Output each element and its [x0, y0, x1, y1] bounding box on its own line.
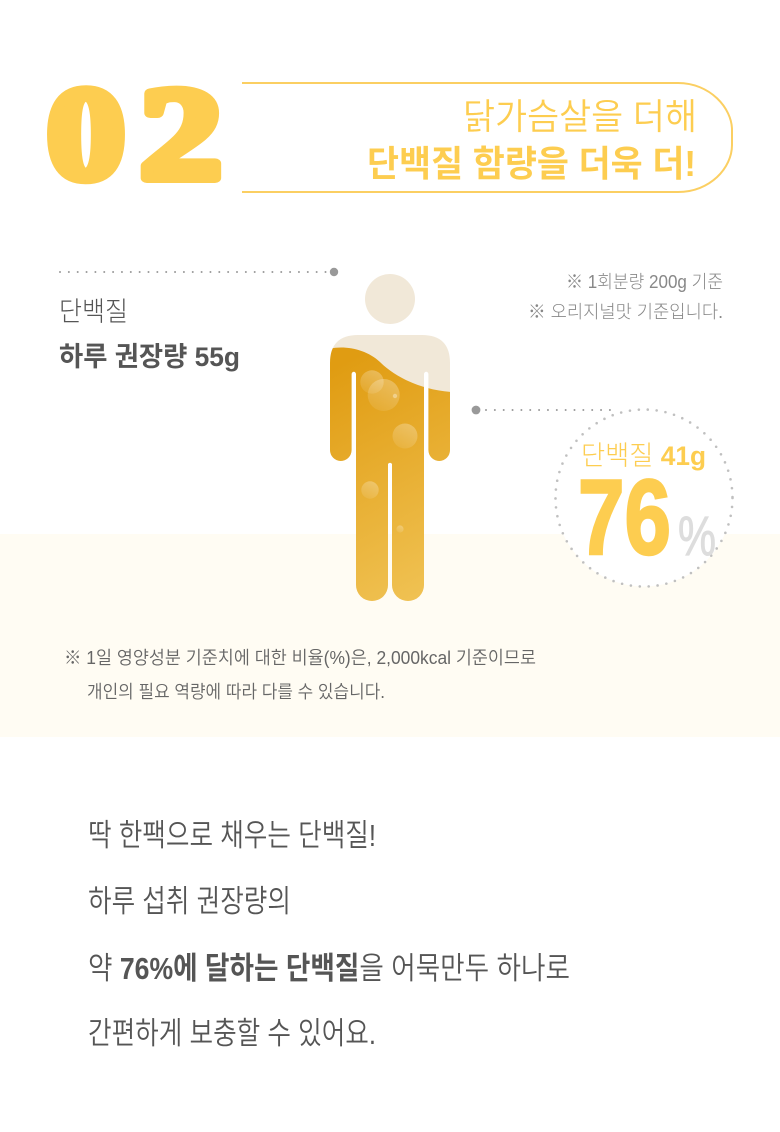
human figure [328, 274, 452, 610]
dotted leader right [472, 406, 610, 414]
dotted circle [556, 410, 732, 586]
bubbles [360, 370, 418, 533]
copy line 3: 약 76%에 달하는 단백질을 어묵만두 하나로 [88, 951, 570, 986]
left label: daily recommended protein [59, 268, 338, 372]
copy line 2: 하루 섭취 권장량의 [88, 884, 291, 919]
copy line 4: 간편하게 보충할 수 있어요. [88, 1016, 376, 1051]
footnote line 2: 개인의 필요 역량에 따라 다를 수 있습니다. [87, 682, 385, 702]
heading line 1: 닭가슴살을 더해 [463, 96, 697, 137]
copy line 1: 딱 한팩으로 채우는 단백질! [88, 818, 376, 853]
heading pill [242, 83, 732, 192]
protein fill level [328, 348, 452, 610]
head [365, 274, 415, 324]
section number 02 [47, 60, 222, 207]
note 1: ※ 1회분량 200g 기준 [566, 272, 723, 292]
section number 02: 0 [47, 60, 125, 207]
protein label: 단백질 [59, 297, 128, 327]
heading line 2: 단백질 함량을 더욱 더! [367, 143, 696, 184]
pill outline [242, 83, 732, 192]
protein 41g callout [472, 406, 732, 586]
body copy [88, 818, 570, 1051]
percent sign: % [678, 504, 716, 567]
serving notes [528, 272, 723, 322]
background band [0, 534, 780, 737]
footnote [64, 648, 536, 702]
note 2: ※ 오리지널맛 기준입니다. [528, 302, 723, 322]
body base [330, 335, 450, 601]
dotted leader left [60, 268, 338, 276]
percent number: 76 [578, 457, 671, 577]
section number 02: 2 [140, 60, 222, 207]
daily amount: 하루 권장량 55g [59, 342, 240, 372]
footnote line 1: ※ 1일 영양성분 기준치에 대한 비율(%)은, 2,000kcal 기준이므로 [64, 648, 536, 668]
callout label: 단백질 41g [581, 441, 706, 471]
